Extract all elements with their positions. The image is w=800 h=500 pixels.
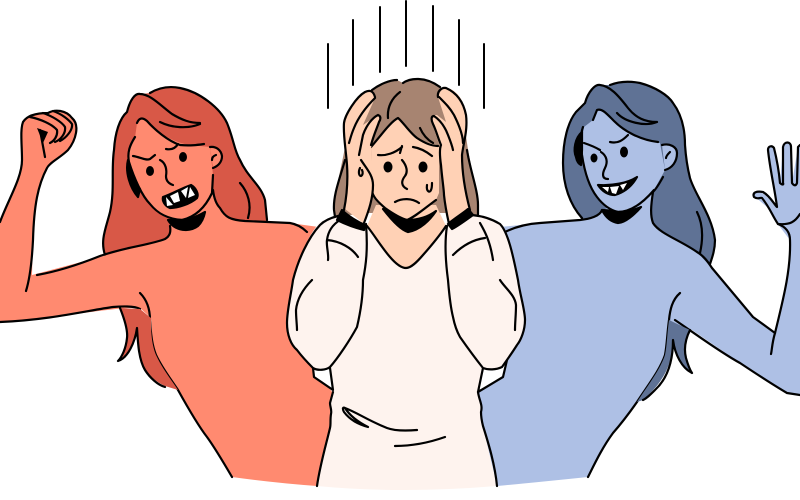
central eyes <box>384 162 392 172</box>
blue hair under arm <box>637 320 692 402</box>
red ear <box>210 147 222 168</box>
blue face <box>575 110 677 223</box>
blue ear <box>662 144 677 170</box>
right cuff <box>448 209 473 229</box>
central neck skin <box>367 205 446 268</box>
left cuff <box>337 210 365 230</box>
sweat drop <box>427 183 432 192</box>
icon: falling stress lines above head <box>328 1 484 108</box>
figure: distressed central woman <box>287 79 525 490</box>
red hair under arm <box>118 308 178 390</box>
central hair <box>334 79 478 217</box>
blue eyes <box>590 154 598 162</box>
central face <box>371 118 439 232</box>
red eyebrows and nose <box>133 144 178 185</box>
red eyes <box>146 166 154 176</box>
central sweater <box>287 214 525 490</box>
figure: angry red woman <box>0 87 340 486</box>
red body and raised fist <box>0 111 340 486</box>
blue body and raised hand <box>470 142 800 486</box>
red face <box>127 118 222 230</box>
red snarling mouth <box>163 185 198 208</box>
red hair <box>103 87 267 258</box>
right hand on head <box>431 88 473 229</box>
blue hair <box>563 82 715 265</box>
left hand on head <box>337 91 380 230</box>
blue grinning mouth <box>598 177 637 195</box>
blue eyebrows and nose <box>584 135 628 179</box>
sweater folds <box>343 408 445 446</box>
figure: sly blue woman <box>470 82 800 486</box>
central eyebrows, nose, mouth <box>378 146 432 203</box>
